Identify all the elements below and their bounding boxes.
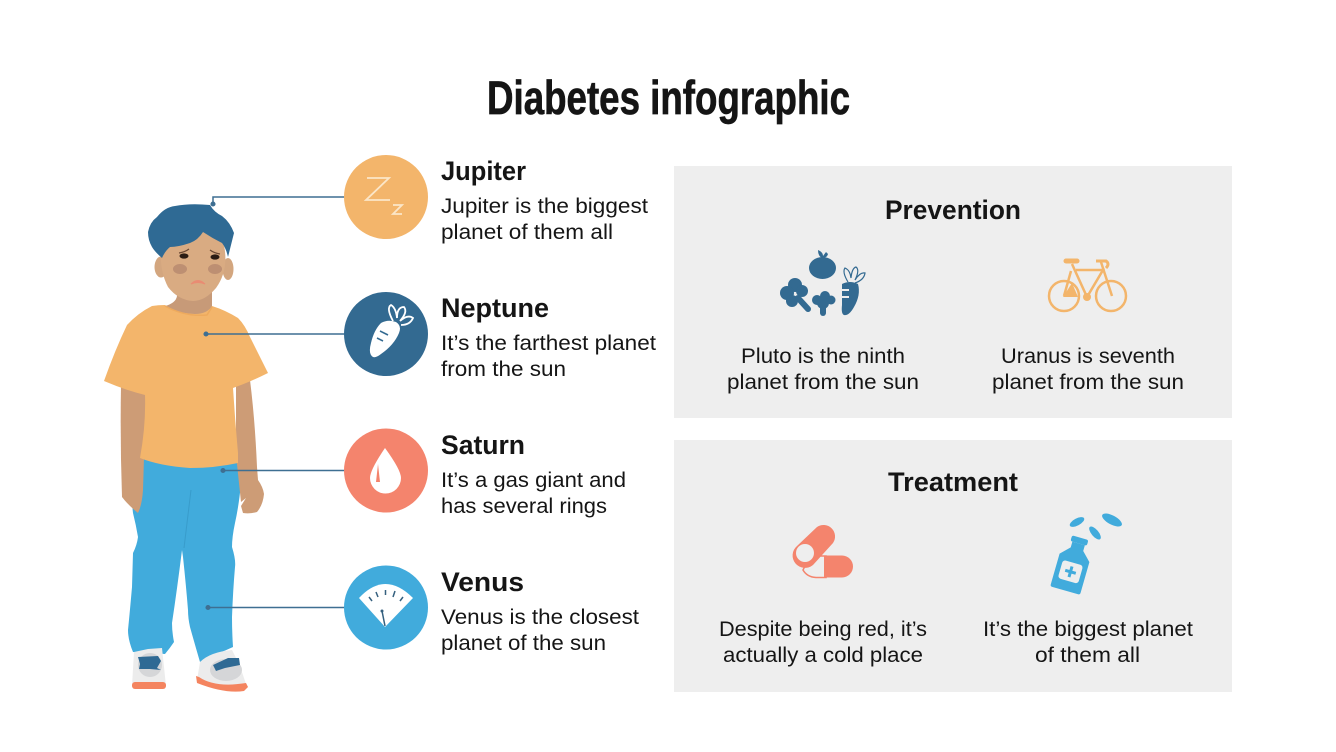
connector: Saturn — [221, 469, 345, 472]
figure: sad boy — [104, 204, 268, 692]
text: Neptune: from the sun — [441, 357, 566, 381]
icon: bicycle — [1049, 261, 1126, 311]
connector: Jupiter — [211, 197, 345, 206]
caption: Uranus: Uranus is seventh — [1001, 344, 1175, 368]
pants — [128, 459, 241, 662]
caption: Despite: Despite being red, it’s — [719, 617, 927, 641]
text: Saturn — [441, 430, 626, 518]
text: Venus: Venus is the closest — [441, 605, 639, 629]
shirt — [104, 305, 268, 468]
text: Saturn: It’s a gas giant and — [441, 468, 626, 492]
caption: Pluto: planet from the sun — [727, 370, 919, 394]
caption: biggest planet: of them all — [1035, 643, 1140, 667]
face — [161, 232, 225, 301]
text: Venus: planet of the sun — [441, 631, 606, 655]
text: Neptune: Neptune — [441, 293, 549, 323]
cheeks — [173, 264, 222, 274]
arms and hands — [121, 380, 264, 513]
icon: blood drop — [344, 428, 428, 512]
left shoe — [132, 648, 166, 689]
mouth — [191, 280, 205, 284]
icon: capsules — [793, 525, 853, 578]
eyes and brows — [179, 249, 220, 260]
icon: sleep — [344, 155, 428, 239]
caption: Uranus: planet from the sun — [992, 370, 1184, 394]
caption: Pluto: Pluto is the ninth — [741, 344, 905, 368]
caption: biggest planet — [983, 617, 1193, 667]
icon: vegetables — [780, 250, 865, 315]
icon: pill bottle — [1050, 511, 1124, 595]
caption: biggest planet: It’s the biggest planet — [983, 617, 1193, 641]
text: Neptune: It’s the farthest planet — [441, 331, 656, 355]
icon: weight scale — [344, 566, 428, 650]
caption: Uranus — [992, 344, 1184, 394]
text: Saturn: has several rings — [441, 494, 607, 518]
connector: Venus — [206, 606, 345, 609]
shirt collar — [165, 306, 212, 315]
connector: Neptune — [204, 332, 345, 336]
right shoe — [196, 650, 248, 692]
neck — [165, 285, 212, 316]
caption: Despite — [719, 617, 927, 667]
ears — [154, 256, 234, 280]
title: Diabetes infographic — [487, 71, 850, 124]
icon: carrot — [344, 292, 428, 376]
hair — [148, 204, 234, 258]
text: Jupiter: planet of them all — [441, 220, 613, 244]
caption: Despite: actually a cold place — [723, 643, 923, 667]
text: Jupiter: Jupiter — [441, 156, 526, 186]
caption: Pluto — [727, 344, 919, 394]
panel: prevention — [674, 166, 1232, 418]
heading: treatment: Treatment — [888, 467, 1018, 497]
text: Saturn: Saturn — [441, 430, 525, 460]
text: Venus: Venus — [441, 567, 524, 597]
pants fold — [184, 490, 191, 548]
heading: prevention: Prevention — [885, 195, 1021, 225]
text: Neptune — [441, 293, 656, 381]
text: Venus — [441, 567, 639, 655]
panel: treatment — [674, 440, 1232, 692]
text: Jupiter — [441, 156, 648, 244]
text: Jupiter: Jupiter is the biggest — [441, 194, 648, 218]
